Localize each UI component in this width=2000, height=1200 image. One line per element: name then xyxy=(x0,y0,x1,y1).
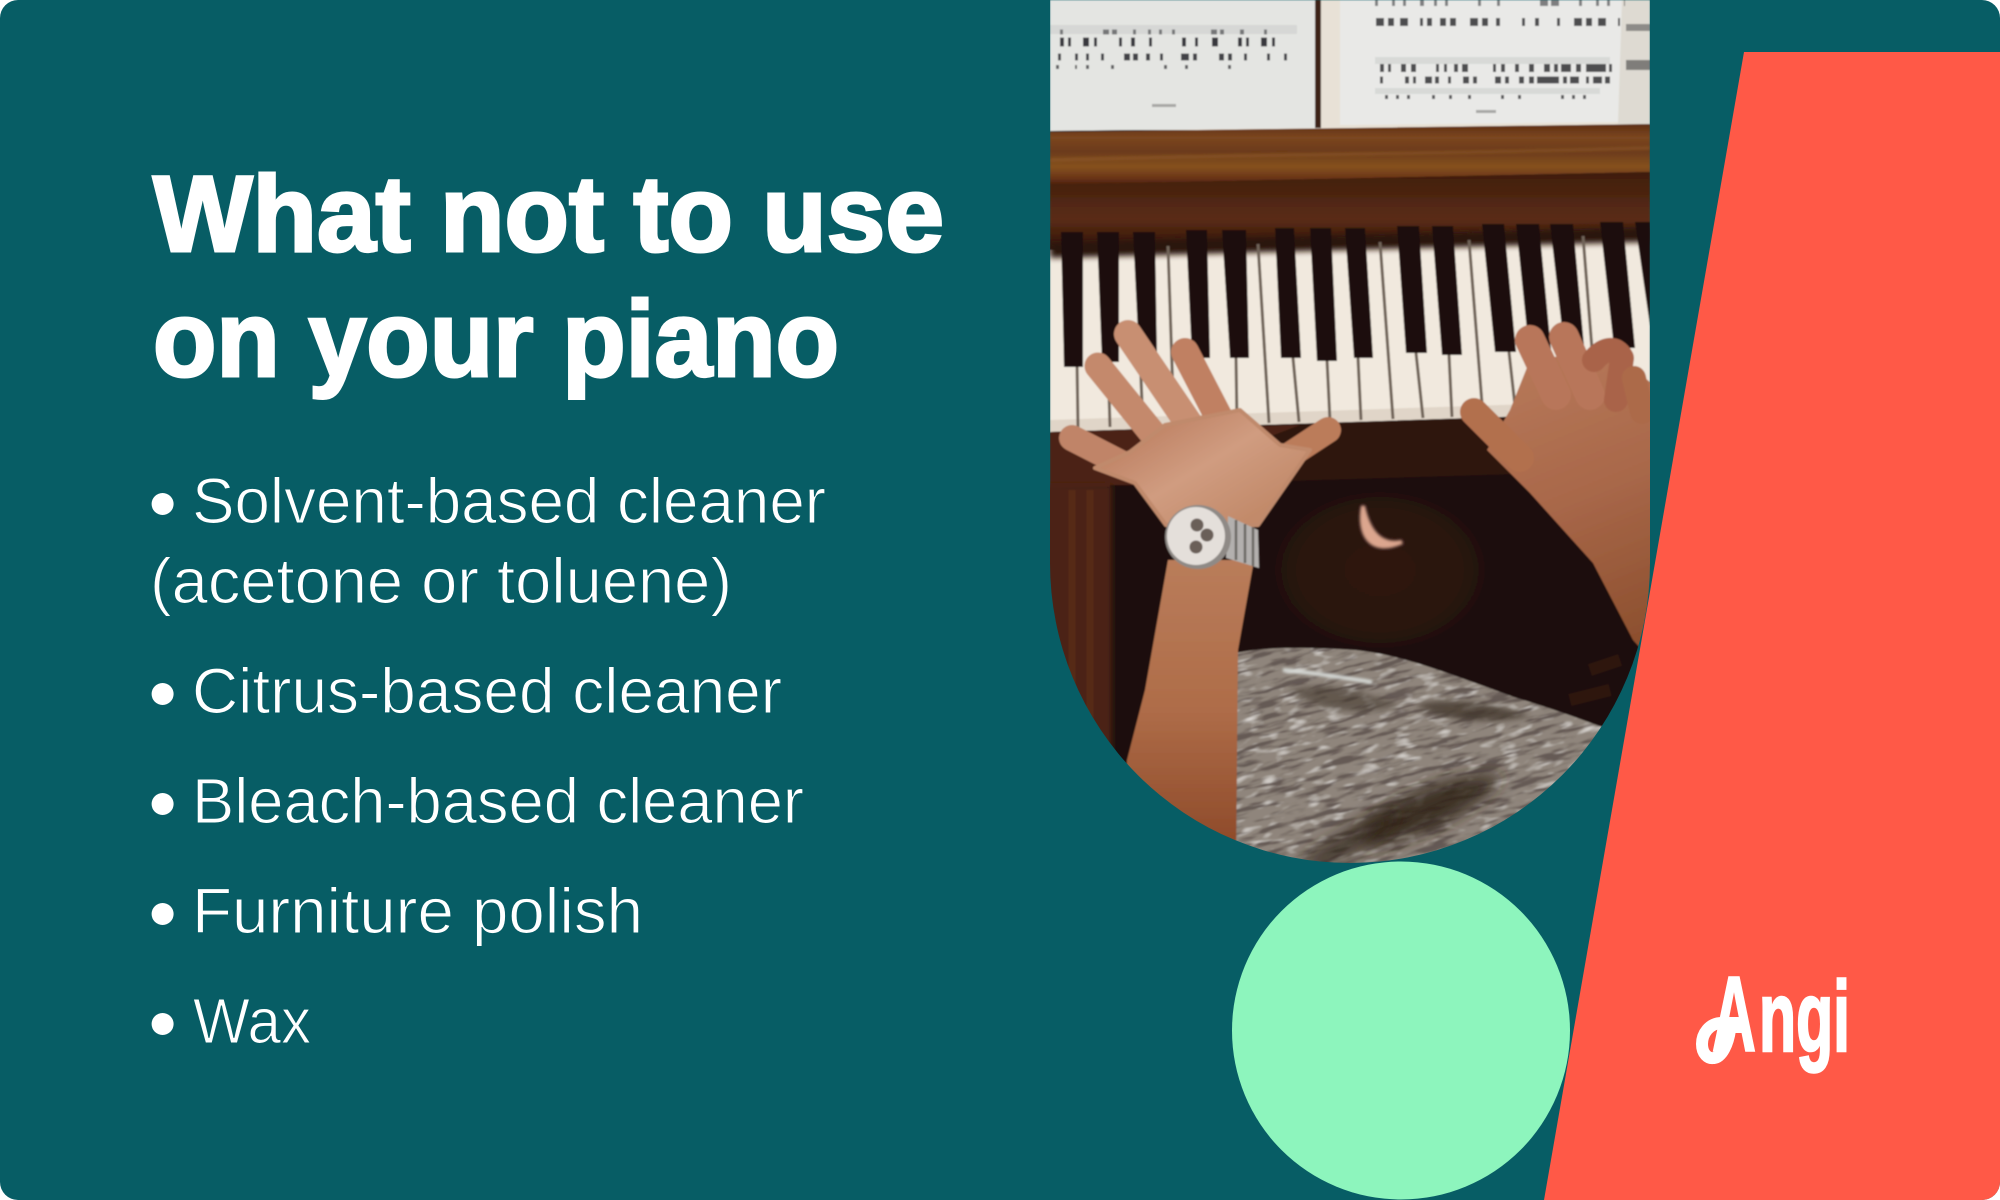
coral slanted panel xyxy=(1544,52,2000,1200)
title: on your piano xyxy=(153,278,839,399)
list item: bleach-based cleaner xyxy=(152,777,802,824)
list item: wax: Wax xyxy=(193,985,311,1057)
mint circle xyxy=(1232,862,1570,1200)
right hand and forearm xyxy=(1474,337,1660,670)
list item: bleach-based cleaner: Bleach-based cleaner xyxy=(192,765,804,837)
sheet music xyxy=(1050,0,1650,131)
list of items to avoid xyxy=(150,465,826,1057)
left hand xyxy=(1072,334,1328,525)
piano front rail and dark interior xyxy=(1050,416,1638,748)
wrist watch xyxy=(1165,505,1259,569)
list item: solvent-based cleaner: (acetone or toluene) xyxy=(150,545,732,617)
list item: solvent-based cleaner xyxy=(150,465,826,617)
piano keyboard xyxy=(1050,222,1650,432)
Angi logo: A xyxy=(1712,954,1756,1074)
Angi logo xyxy=(1696,976,1846,1074)
list item: wax xyxy=(152,1000,310,1043)
cloth folds xyxy=(1283,670,1530,875)
list item: citrus-based cleaner xyxy=(152,667,781,714)
list item: citrus-based cleaner: Citrus-based cleaner xyxy=(192,655,782,727)
grey cloth sleeve xyxy=(1235,646,1602,863)
list item: solvent-based cleaner: Solvent-based cleaner xyxy=(192,465,826,537)
list item: furniture polish: Furniture polish xyxy=(192,875,643,947)
wooden music rest xyxy=(1050,124,1650,250)
title xyxy=(153,153,944,399)
Angi logo: ngi xyxy=(1759,961,1850,1073)
title: What not to use xyxy=(153,153,944,274)
piano photo in arch shape xyxy=(1050,0,1650,863)
left forearm xyxy=(1126,558,1254,840)
